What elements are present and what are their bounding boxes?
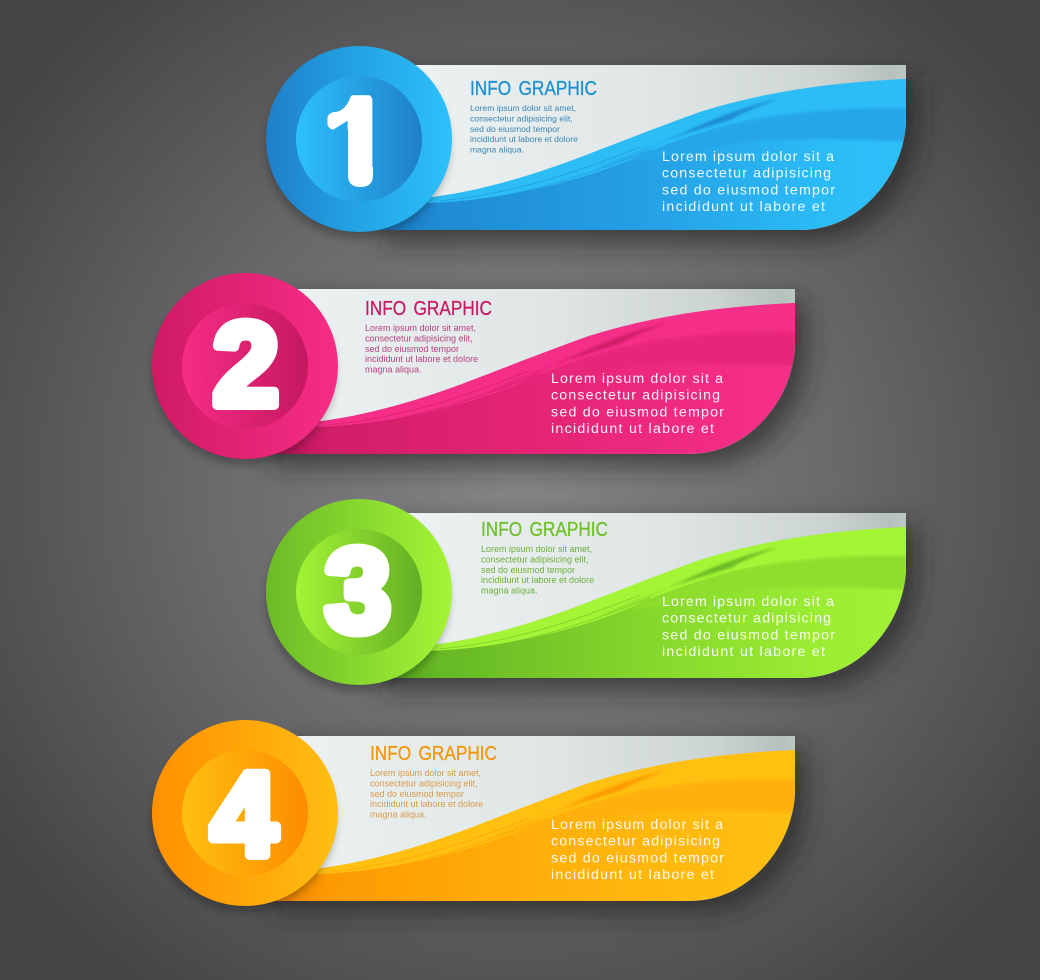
small text 3: Lorem ipsum dolor sit amet, [481,544,592,554]
wave band 4 [259,750,795,901]
body text 1: sed do eiusmod tempor [662,182,835,198]
silver card 1 [370,65,906,230]
small text 4: incididunt ut labore et dolore [370,799,483,809]
badge 3 [266,499,452,689]
body text 2: Lorem ipsum dolor sit a [551,371,723,387]
wave band 3 [370,527,906,678]
body text 3: Lorem ipsum dolor sit a [662,594,834,610]
body text 3: incididunt ut labore et [662,644,825,660]
small text 1: consectetur adipisicing elit, [470,113,573,123]
body text 2: sed do eiusmod tempor [551,404,724,420]
body text 2: incididunt ut labore et [551,421,714,437]
number 4: 4 [211,749,277,881]
body text 2: consectetur adipisicing [551,388,720,404]
silver card 3 [370,513,906,678]
shadow: banner 4 [271,748,807,913]
body text 3: consectetur adipisicing [662,611,831,627]
shadow: banner 1 [382,77,918,242]
heading 1: INFO GRAPHIC [470,78,597,100]
small text 3: consectetur adipisicing elit, [481,554,589,564]
small text 4: sed do eiusmod tempor [370,789,464,799]
panel: banner 3 green [266,499,918,690]
small text 3: incididunt ut labore et dolore [481,575,594,585]
small text 2: sed do eiusmod tempor [365,344,459,354]
number 3: 3 [325,525,391,657]
body text 4: consectetur adipisicing [551,834,720,850]
small text 2: consectetur adipisicing elit, [365,333,473,343]
body text 3: sed do eiusmod tempor [662,627,835,643]
small text 3: magna aliqua. [481,586,538,596]
panel: banner 2 pink [152,273,807,466]
wave band 1 [370,79,906,230]
small text 4: Lorem ipsum dolor sit amet, [370,768,481,778]
silver card 2 [259,289,795,454]
badge 1 [266,46,452,236]
body text 4: incididunt ut labore et [551,867,714,883]
panel: banner 4 orange [152,720,807,913]
body text 4: sed do eiusmod tempor [551,850,724,866]
wave band 2 [259,303,795,454]
small text 2: magna aliqua. [365,365,422,375]
body text 4: Lorem ipsum dolor sit a [551,817,723,833]
small text 2: Lorem ipsum dolor sit amet, [365,323,476,333]
small text 2: incididunt ut labore et dolore [365,354,478,364]
small text 1: incididunt ut labore et dolore [470,134,578,144]
number 2: 2 [213,299,279,431]
body text 1: consectetur adipisicing [662,166,831,182]
small text 1: Lorem ipsum dolor sit amet, [470,103,576,113]
small text 1: sed do eiusmod tempor [470,124,560,134]
heading 4: INFO GRAPHIC [370,743,497,765]
body text 1: incididunt ut labore et [662,199,825,215]
panel: banner 1 blue [266,46,918,242]
small text 4: consectetur adipisicing elit, [370,778,478,788]
heading 3: INFO GRAPHIC [481,519,608,541]
shadow: banner 3 [382,525,918,690]
number 1: 1 [323,73,391,209]
badge 4 [152,720,338,910]
small text 1: magna aliqua. [470,145,524,155]
heading 2: INFO GRAPHIC [365,298,492,320]
body text 1: Lorem ipsum dolor sit a [662,149,834,165]
shadow: banner 2 [271,301,807,466]
badge 2 [152,273,338,463]
silver card 4 [259,736,795,901]
small text 3: sed do eiusmod tempor [481,565,575,575]
small text 4: magna aliqua. [370,810,427,820]
